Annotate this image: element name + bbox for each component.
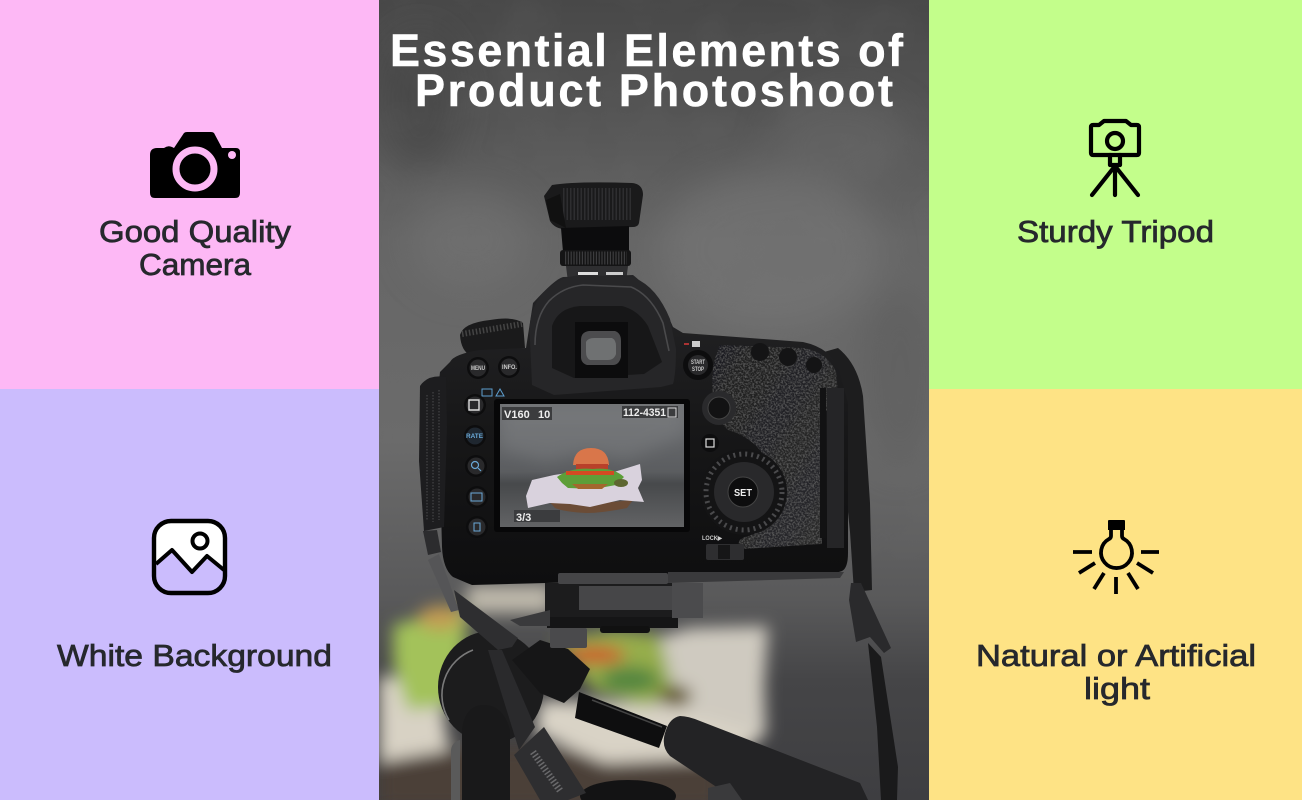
- plate: [548, 500, 633, 513]
- blurred background burger: [379, 585, 768, 800]
- right side controls: SET: [734, 488, 752, 499]
- right camera strap: [824, 348, 898, 800]
- title: Essential Elements of: [390, 25, 904, 76]
- icon: light bulb: [1073, 520, 1159, 594]
- paper: [526, 464, 644, 508]
- panel: good quality camera: [0, 0, 379, 389]
- camera dial: [460, 319, 525, 356]
- camera hot-shoe microphone: [544, 182, 643, 282]
- tripod head and handle: [438, 583, 868, 800]
- left side buttons: RATE: [466, 434, 483, 440]
- label: good quality camera: [99, 214, 292, 282]
- burger: [557, 448, 628, 489]
- screen readouts: 10: [538, 409, 550, 421]
- camera LCD screen: [500, 404, 686, 527]
- left side buttons: MENU: [471, 366, 485, 372]
- icon: tripod camera: [1091, 121, 1139, 195]
- right side controls: LOCK▶: [702, 535, 722, 542]
- eyepiece: [530, 275, 676, 395]
- label: natural or artificial light: [976, 638, 1256, 706]
- photo: camera on tripod: [379, 0, 940, 800]
- panel: sturdy tripod: [929, 0, 1302, 389]
- screen bezel: [494, 399, 690, 532]
- underside strip: [668, 572, 844, 583]
- screen readouts: [502, 406, 678, 524]
- left side buttons: [464, 356, 520, 538]
- label: natural or artificial light: light: [1084, 671, 1150, 706]
- panel: white background: [0, 389, 379, 800]
- panel: natural or artificial light: [929, 389, 1302, 800]
- title: [390, 25, 904, 116]
- screen readouts: V160: [504, 409, 530, 421]
- textured hand grip: [712, 345, 839, 549]
- icon: picture: [154, 521, 225, 593]
- right side controls: STOP: [692, 367, 704, 373]
- left camera strap: [419, 376, 586, 800]
- right side controls: [683, 341, 822, 560]
- right side controls: START: [691, 360, 705, 366]
- icon: camera: [150, 132, 240, 198]
- label: good quality camera: Camera: [139, 247, 252, 282]
- screen readouts: 112-4351: [623, 407, 666, 419]
- label: natural or artificial light: Natural or Artificial: [976, 638, 1256, 673]
- label: good quality camera: Good Quality: [99, 214, 292, 249]
- screen readouts: 3/3: [516, 512, 531, 524]
- label: sturdy tripod: Sturdy Tripod: [1017, 214, 1214, 249]
- camera body: [438, 275, 848, 585]
- left side buttons: INFO.: [502, 365, 517, 371]
- title: Product Photoshoot: [415, 65, 893, 116]
- label: white background: White Background: [57, 638, 332, 673]
